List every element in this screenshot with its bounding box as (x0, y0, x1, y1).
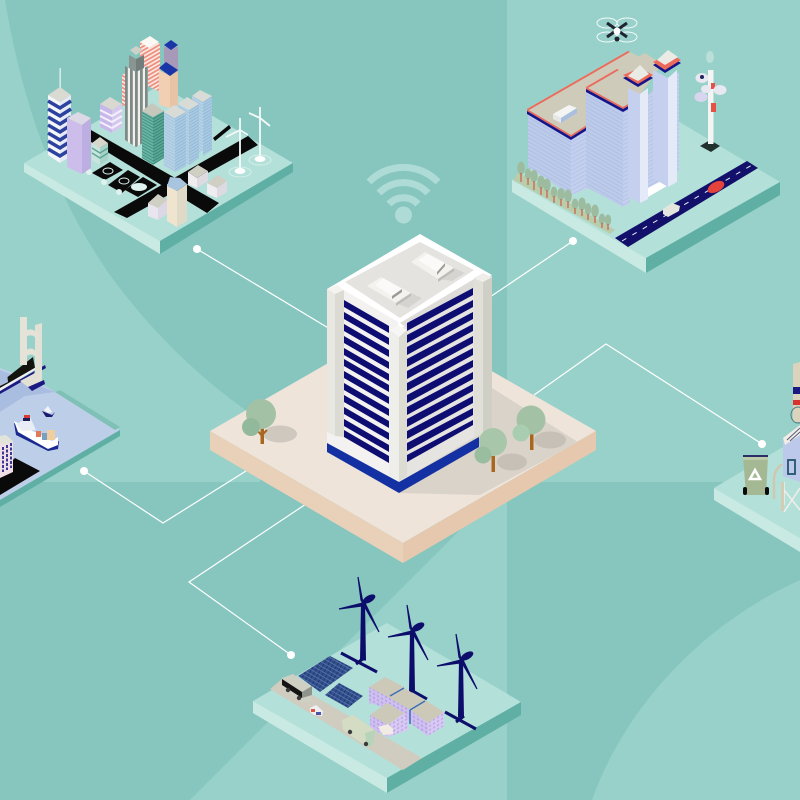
tree right back (512, 406, 566, 450)
roads (91, 125, 258, 218)
left windows (344, 300, 389, 463)
central platform (210, 320, 596, 563)
main low building (527, 51, 646, 195)
platform (253, 623, 521, 793)
platform (512, 102, 780, 273)
drone (597, 18, 637, 42)
purple tower with blue top (164, 40, 178, 73)
blue striped spire tower (48, 68, 71, 163)
chimney (791, 362, 800, 423)
small car (310, 705, 323, 716)
bridge (0, 317, 46, 394)
panel: right recycling plant (714, 362, 800, 552)
lilac striped small tower (100, 97, 122, 133)
red car (706, 178, 726, 196)
right tower column (653, 50, 681, 187)
portal (648, 178, 667, 197)
teal glass tower (142, 103, 164, 165)
small boat (42, 406, 55, 417)
access road (270, 678, 422, 770)
plant building (774, 425, 800, 512)
platform (24, 85, 293, 254)
solar array large (298, 656, 353, 692)
ground with road (0, 458, 40, 495)
wind turbine 2 (388, 605, 428, 699)
rear wing (648, 72, 679, 195)
wind turbine 3 (437, 634, 477, 729)
car park details (86, 168, 147, 195)
solar array small (325, 683, 363, 708)
right pillar (474, 278, 483, 438)
blue base (327, 437, 479, 493)
rooftop unit 2 (411, 252, 465, 282)
panel: top-left city district (24, 36, 293, 254)
tan tower (159, 62, 178, 108)
rooftop unit (553, 105, 577, 123)
camera pole (694, 51, 726, 152)
waterfront tower (0, 435, 13, 478)
light blue tower front (164, 105, 186, 172)
tower body (327, 234, 492, 493)
wind turbines white (226, 107, 271, 177)
hedge with trees (513, 162, 615, 234)
pale green bus (342, 715, 375, 747)
lilac tower (67, 112, 91, 174)
panel: central smart building (210, 234, 596, 563)
panel: bottom energy district (253, 577, 521, 793)
pink towers (122, 36, 160, 110)
white car (663, 203, 680, 217)
building shadow (399, 388, 578, 495)
cream tower front (167, 177, 187, 227)
left pillar (327, 289, 335, 436)
panel: top-right surveillance campus (512, 18, 780, 273)
right windows (407, 288, 473, 462)
roof (327, 234, 492, 330)
connector lines (84, 241, 762, 655)
tree front (474, 428, 527, 472)
cargo ship (14, 415, 59, 451)
panel: left harbour (0, 317, 120, 507)
wind turbine 1 (339, 577, 379, 672)
centre pillar (389, 330, 399, 481)
platform (0, 368, 120, 507)
light blue tower rear (192, 90, 212, 158)
mid building (586, 53, 662, 207)
platform (714, 447, 800, 552)
left tower column (623, 65, 653, 203)
dark bus (282, 674, 312, 702)
grey tall tower (125, 46, 148, 147)
right fascia (400, 279, 474, 328)
white low blocks (148, 165, 227, 220)
rooftop unit 1 (367, 277, 422, 308)
tree left (242, 399, 297, 444)
lilac buildings (369, 677, 444, 737)
light blue tower middle (178, 97, 199, 165)
road (615, 161, 758, 247)
connector end dots (80, 237, 766, 659)
recycling bin (743, 455, 769, 495)
left fascia (344, 290, 398, 332)
icon: wifi signal (369, 167, 438, 224)
small teal-striped block (92, 137, 108, 165)
